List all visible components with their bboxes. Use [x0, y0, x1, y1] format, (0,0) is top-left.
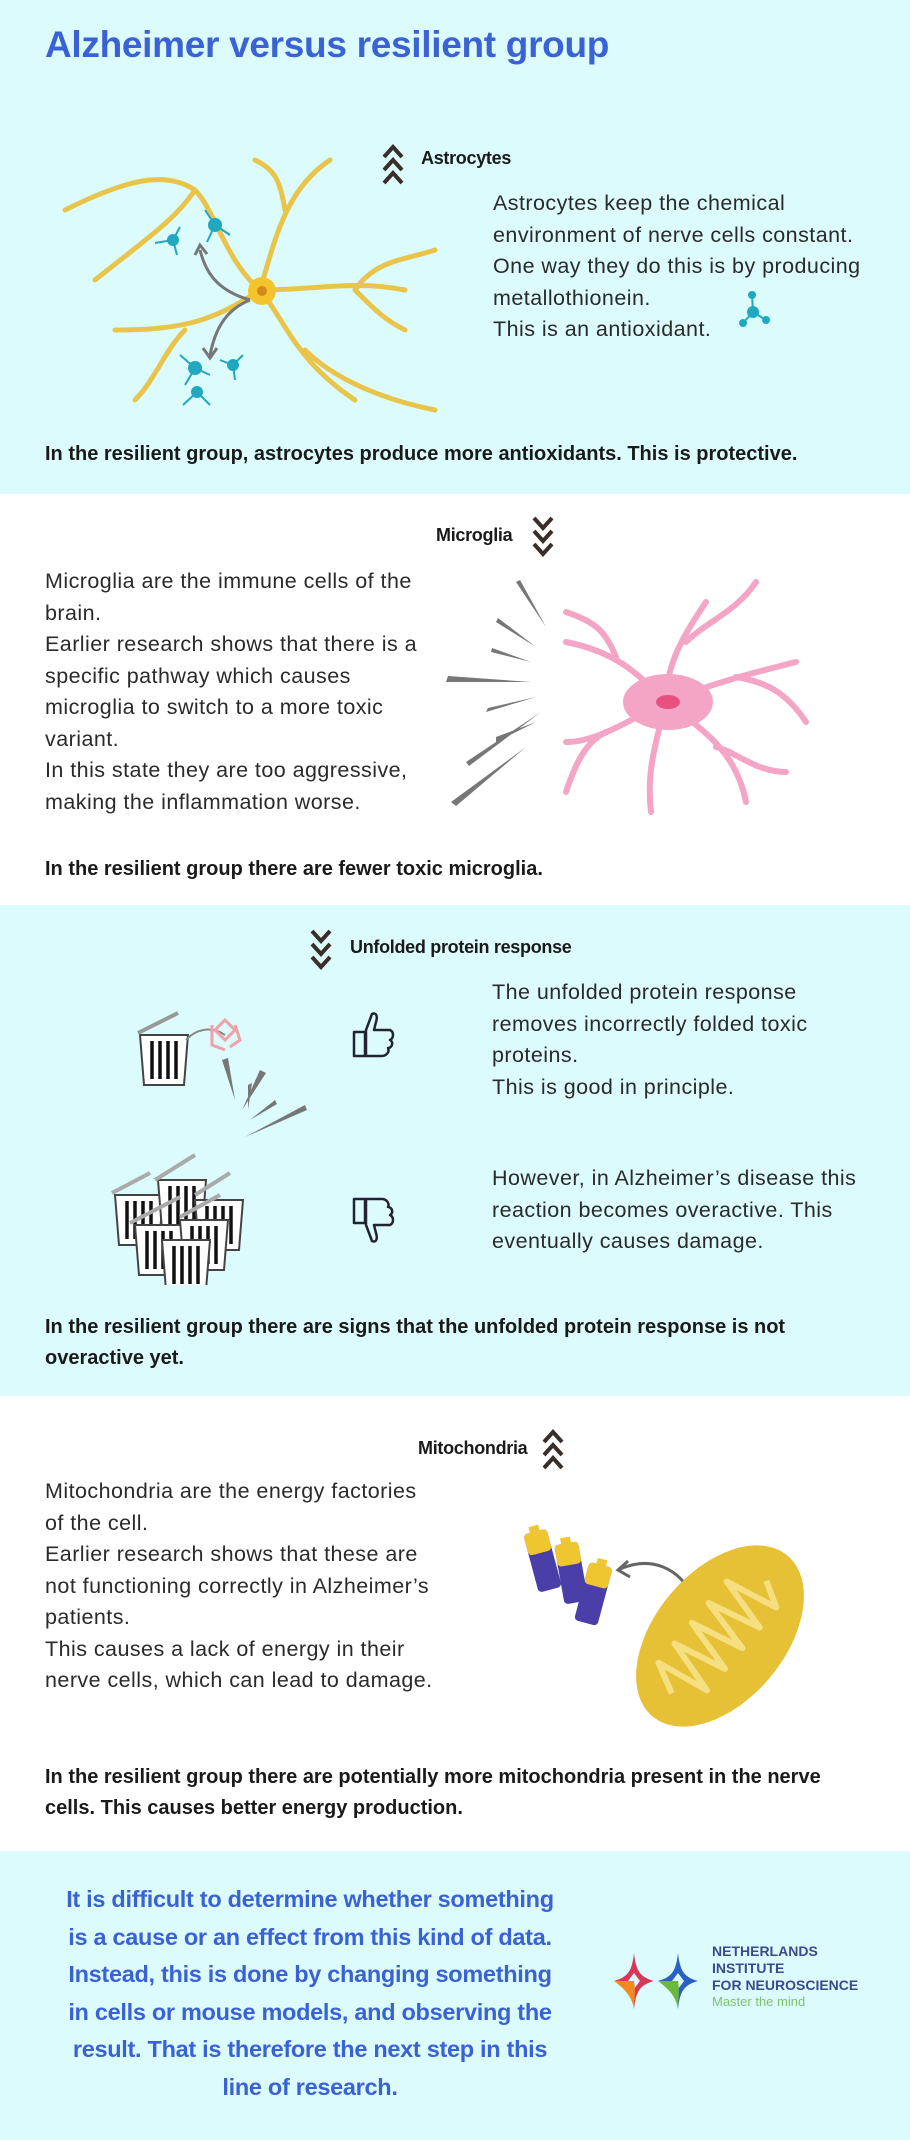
- text: astrocytes description: This is an antioxidant.: [493, 317, 711, 341]
- text: microglia description: brain.: [45, 600, 101, 624]
- text: UPR description: The unfolded protein response: [492, 980, 797, 1004]
- text: mitochondria description: not functioning correctly in Alzheimer’s: [45, 1574, 429, 1598]
- text: UPR description: proteins.: [492, 1043, 579, 1067]
- text: mitochondria description: nerve cells, which can lead to damage.: [45, 1668, 433, 1692]
- icon: chevrons up: [542, 1429, 564, 1470]
- heading: astrocytes: Astrocytes: [421, 148, 511, 168]
- text: UPR description: removes incorrectly folded toxic: [492, 1012, 808, 1036]
- icon: chevrons down: [532, 516, 554, 557]
- text: mitochondria description: [45, 1479, 433, 1692]
- conclusion: UPR: overactive yet.: [45, 1347, 184, 1369]
- conclusion: microglia: In the resilient group there are fewer toxic microglia.: [45, 858, 543, 880]
- text: microglia description: In this state they are too aggressive,: [45, 758, 408, 782]
- text: microglia description: [45, 569, 417, 814]
- text: closing statement: Instead, this is done by changing something: [68, 1961, 552, 1987]
- icon: chevrons up: [382, 144, 404, 184]
- illustration: microglia: [446, 579, 809, 815]
- heading: unfolded protein response: Unfolded protein response: [350, 937, 572, 957]
- text: UPR description: This is good in principle.: [492, 1074, 734, 1098]
- text: microglia description: variant.: [45, 726, 119, 750]
- text: closing statement: [66, 1886, 554, 2100]
- text: astrocytes description: Astrocytes keep the chemical: [493, 191, 785, 215]
- text: astrocytes description: [493, 191, 861, 341]
- panel: unfolded protein response: [0, 905, 910, 1396]
- text: mitochondria description: Mitochondria are the energy factories: [45, 1479, 417, 1503]
- text: UPR overactive: eventually causes damage.: [492, 1229, 764, 1253]
- text: mitochondria description: Earlier research shows that these are: [45, 1542, 418, 1566]
- logo: Netherlands Institute for Neuroscience: INSTITUTE: [712, 1960, 784, 1976]
- panel: closing note: [0, 1851, 910, 2140]
- heading: microglia: Microglia: [436, 525, 512, 545]
- text: UPR overactive: [492, 1166, 856, 1253]
- text: microglia description: microglia to switch to a more toxic: [45, 695, 383, 719]
- icon: chevrons down: [310, 930, 332, 970]
- conclusion: mitochondria: [45, 1766, 821, 1819]
- text: closing statement: result. That is therefore the next step in this: [73, 2036, 547, 2062]
- text: closing statement: is a cause or an effect from this kind of data.: [68, 1924, 552, 1950]
- text: closing statement: in cells or mouse models, and observing the: [68, 1998, 552, 2024]
- text: mitochondria description: of the cell.: [45, 1510, 148, 1534]
- text: UPR overactive: However, in Alzheimer’s disease this: [492, 1166, 856, 1190]
- logo: Netherlands Institute for Neuroscience: NETHERLANDS: [712, 1943, 818, 1959]
- text: mitochondria description: This causes a lack of energy in their: [45, 1636, 405, 1660]
- panel: astrocytes: [0, 0, 910, 494]
- text: UPR overactive: reaction becomes overactive. This: [492, 1198, 833, 1222]
- text: closing statement: It is difficult to determine whether something: [66, 1886, 554, 1912]
- title: Alzheimer versus resilient group: [45, 24, 609, 65]
- conclusion: astrocytes: In the resilient group, astrocytes produce more antioxidants. This is protective.: [45, 443, 797, 465]
- panel: microglia: [0, 494, 910, 905]
- text: microglia description: Microglia are the immune cells of the: [45, 569, 412, 593]
- logo: Netherlands Institute for Neuroscience: Master the mind: [712, 1994, 805, 2009]
- text: closing statement: line of research.: [222, 2074, 398, 2100]
- text: microglia description: Earlier research shows that there is a: [45, 632, 417, 656]
- text: astrocytes description: metallothionein.: [493, 286, 651, 310]
- text: astrocytes description: environment of nerve cells constant.: [493, 222, 853, 246]
- text: astrocytes description: One way they do this is by producing: [493, 254, 861, 278]
- logo: Netherlands Institute for Neuroscience: [614, 1943, 858, 2009]
- icon: molecule: [739, 291, 770, 327]
- icon: thumbs down: [352, 1198, 394, 1243]
- text: microglia description: making the inflammation worse.: [45, 790, 361, 814]
- panel: mitochondria: [0, 1396, 910, 1851]
- illustration: astrocyte: [62, 158, 438, 412]
- conclusion: mitochondria: cells. This causes better energy production.: [45, 1797, 463, 1819]
- illustration: trash cans: [111, 1011, 307, 1285]
- heading: mitochondria: Mitochondria: [418, 1438, 527, 1458]
- text: UPR description: [492, 980, 808, 1098]
- conclusion: mitochondria: In the resilient group there are potentially more mitochondria present in the nerve: [45, 1766, 821, 1788]
- text: mitochondria description: patients.: [45, 1605, 130, 1629]
- illustration: batteries and mitochondrion: [524, 1524, 804, 1727]
- logo: Netherlands Institute for Neuroscience: FOR NEUROSCIENCE: [712, 1977, 858, 1993]
- text: microglia description: specific pathway which causes: [45, 664, 351, 688]
- icon: thumbs up: [352, 1012, 394, 1058]
- conclusion: UPR: [45, 1316, 785, 1369]
- conclusion: UPR: In the resilient group there are signs that the unfolded protein response is not: [45, 1316, 785, 1338]
